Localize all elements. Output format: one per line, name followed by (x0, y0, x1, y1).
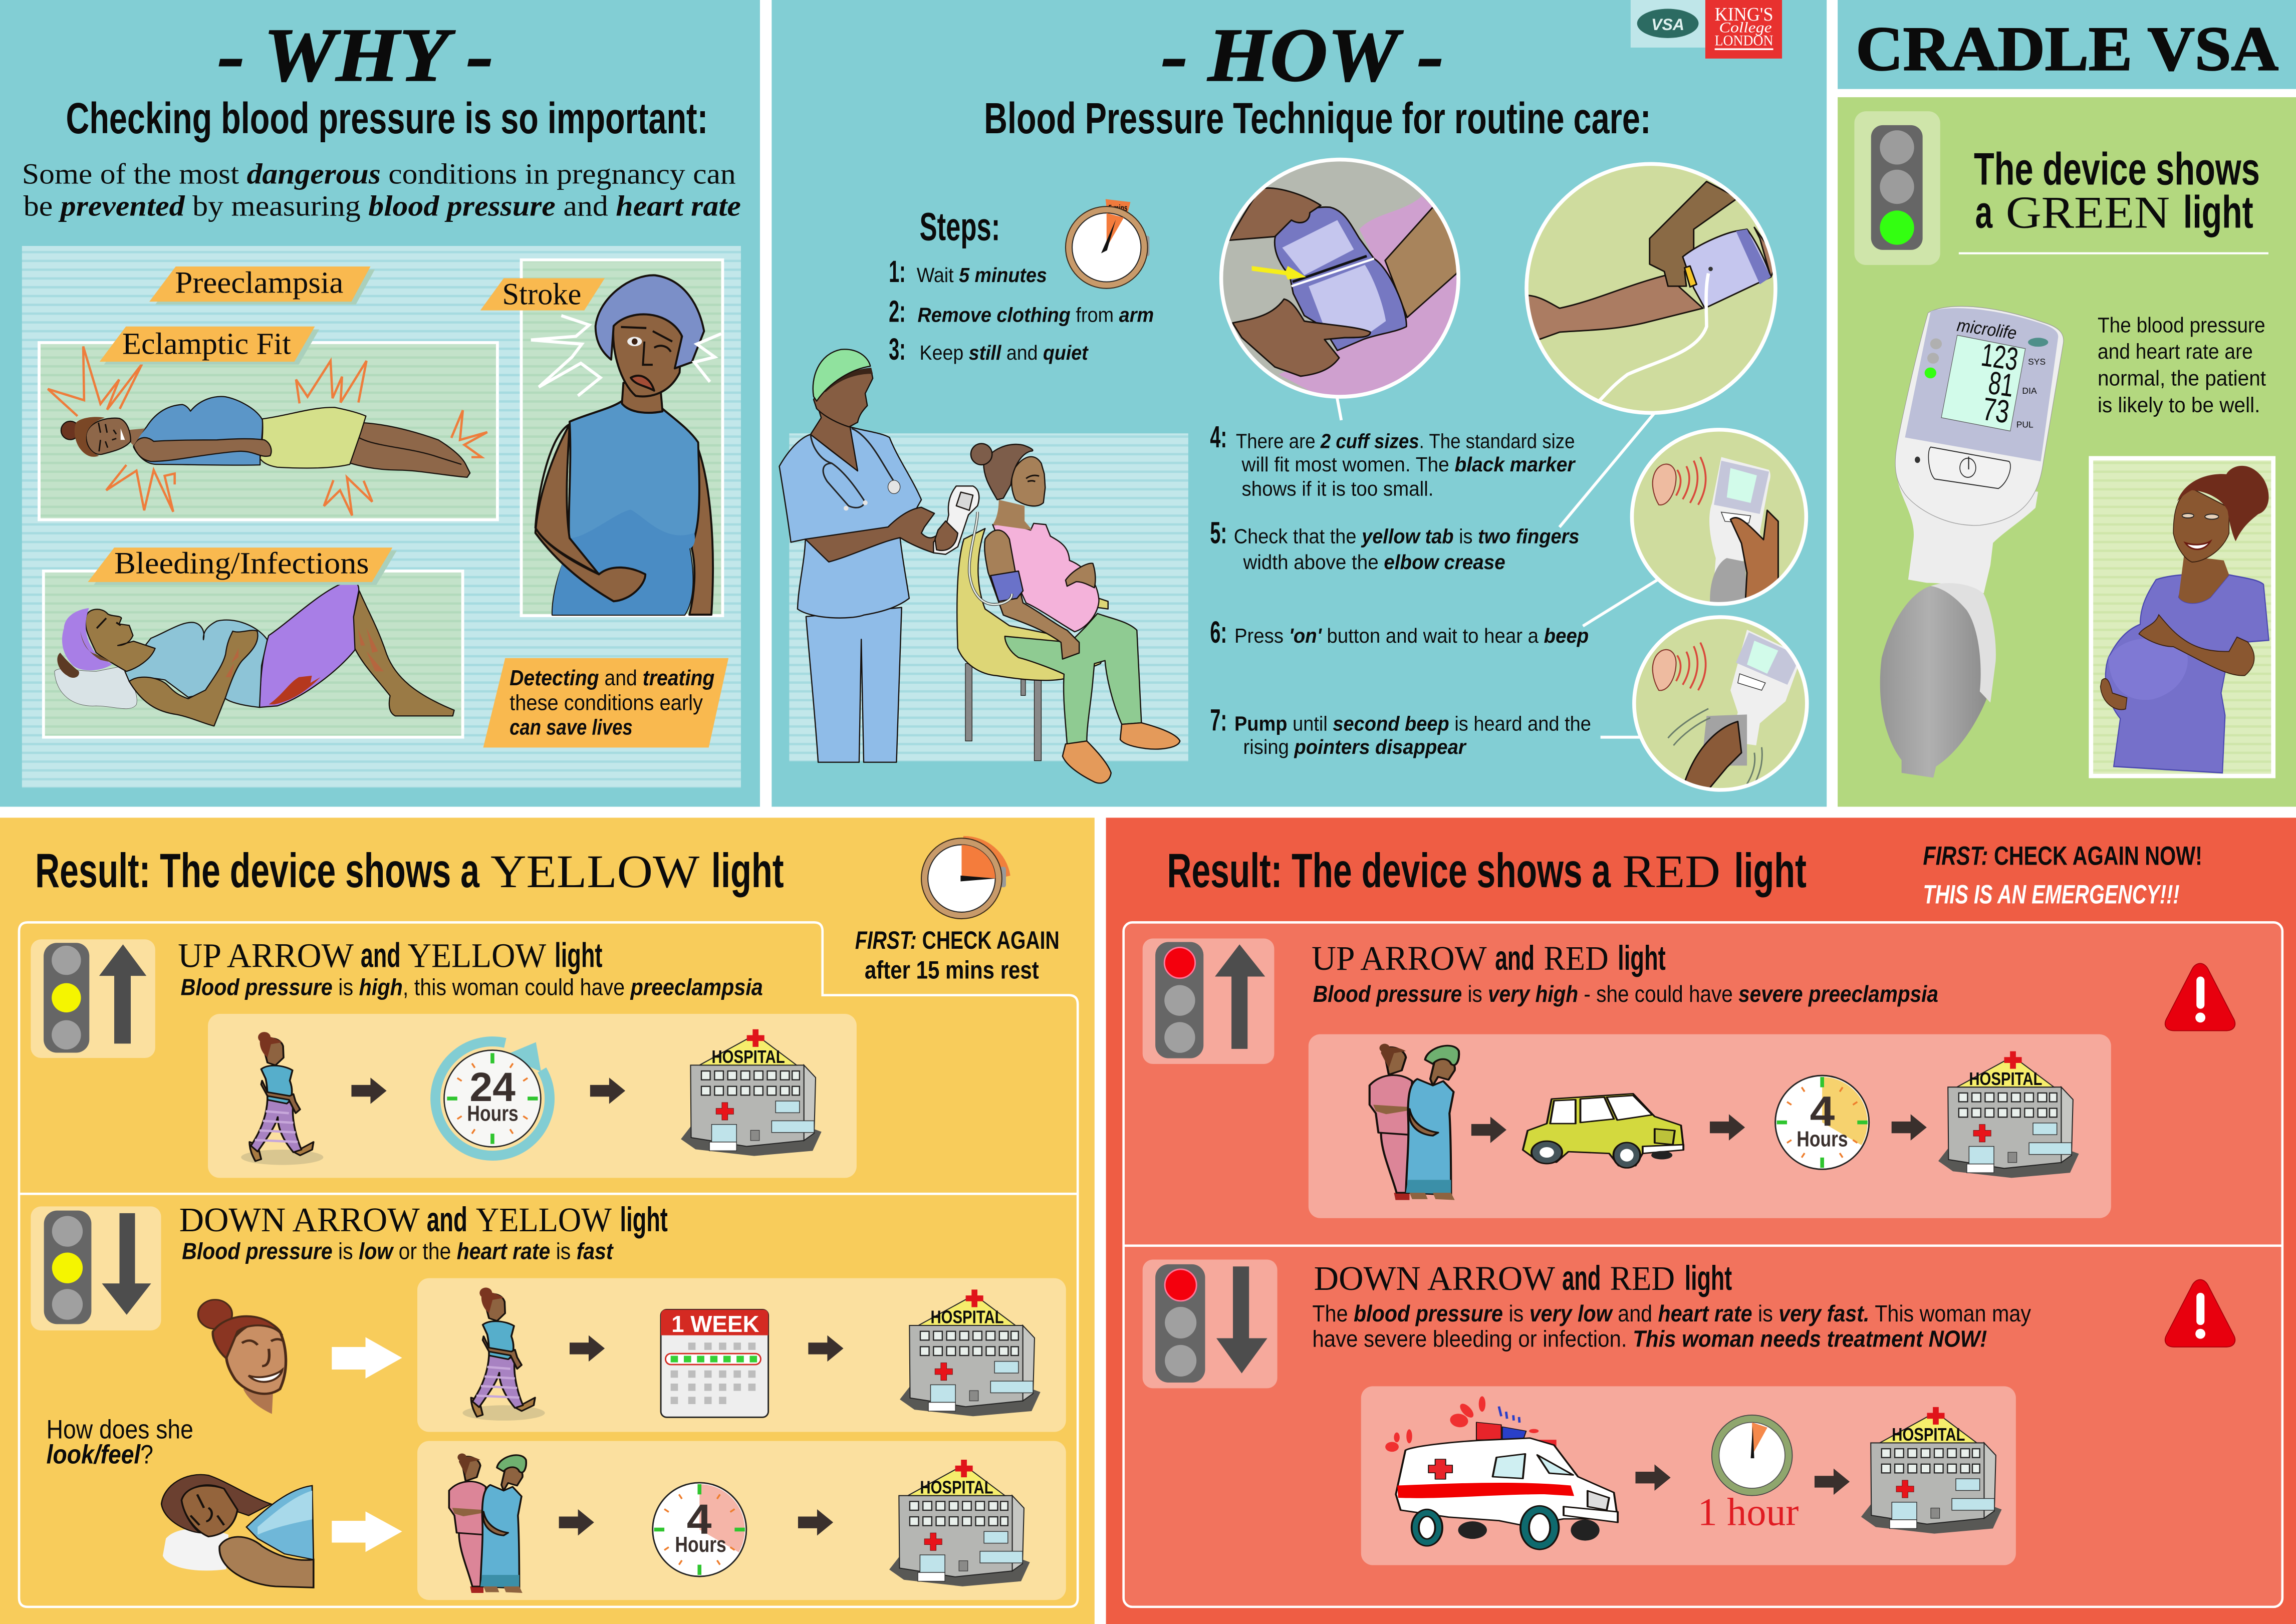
steps 4 to 7: width above the elbow crease (1243, 551, 1505, 574)
heading: yellow light: light (711, 844, 784, 898)
section: down arrow and red light (1143, 1259, 2235, 1565)
label: preeclampsia (149, 266, 375, 305)
text: down arrow heading (179, 1200, 668, 1239)
heading: green light: light (2183, 187, 2253, 237)
icon: traffic light up arrow (31, 939, 155, 1058)
steps 4 to 7: 4: (1210, 420, 1227, 454)
heading: steps: Steps: (920, 204, 1000, 248)
text: down arrow description: The blood pressure is very low and heart rate is very fast. This woman may (1312, 1300, 2031, 1326)
text: down arrow heading: and (427, 1200, 467, 1239)
text: up arrow heading: light (1618, 939, 1666, 977)
illustration: blood pressure device: 81 (1986, 365, 2016, 404)
icon: yellow car (1523, 1094, 1683, 1168)
icon: 4 hour clock: Hours (675, 1532, 726, 1557)
subtitle: how: Blood Pressure Technique for routine care: (984, 94, 1651, 143)
icon: hospital: HOSPITAL (711, 1046, 785, 1067)
panel: healthy woman (2091, 458, 2273, 776)
illustration: blood pressure device: 123 (1979, 337, 2020, 377)
panel: yellow light (0, 818, 1095, 1624)
intro text: Some of the most dangerous conditions in pregnancy can (22, 158, 736, 190)
icon: green traffic light (1854, 111, 1940, 265)
text: normal result: is likely to be well. (2098, 393, 2260, 417)
heading: yellow light: Result: The device shows a (35, 844, 480, 898)
pathway box: 24 hours (208, 1014, 857, 1178)
logo: vsa: VSA (1651, 16, 1684, 34)
arrow (808, 1335, 844, 1362)
illustration circle: yellow tab position (1526, 164, 1778, 413)
icon: 4 hour clock: 4 (1810, 1088, 1835, 1135)
arrow (1710, 1114, 1745, 1141)
steps 1 to 3: Remove clothing from arm (917, 303, 1154, 326)
steps 1 to 3: 1: (889, 254, 906, 289)
steps 1 to 3: Wait 5 minutes (917, 263, 1047, 287)
icon: hospital: HOSPITAL (1969, 1068, 2042, 1089)
icon: hospital: HOSPITAL (1892, 1424, 1965, 1445)
icon: calendar (661, 1309, 769, 1417)
steps 4 to 7: will fit most women. The black marker (1241, 453, 1576, 476)
illustration circle: cuff sizes (1221, 160, 1469, 407)
heading: red light: RED (1622, 846, 1720, 898)
icon: hospital: HOSPITAL (930, 1307, 1004, 1327)
icon: warning triangle (2165, 1280, 2235, 1347)
panel: how (772, 0, 1827, 806)
steps 1 to 3: 2: (889, 294, 906, 329)
text: up arrow heading: and (1495, 939, 1535, 977)
label: eclamptic fit (100, 327, 319, 365)
icon: stopwatch 15 mins (921, 836, 1010, 919)
callout: early detection (483, 658, 728, 747)
label: bleeding infections: Bleeding/Infections (114, 546, 369, 580)
steps 4 to 7 (1210, 420, 1591, 758)
text: check again: after 15 mins rest (865, 956, 1039, 984)
icon: 24 hour clock: 24 (469, 1064, 516, 1110)
icon: one hour clock (1712, 1415, 1793, 1496)
icon: hospital (681, 1029, 822, 1156)
arrow (351, 1077, 387, 1104)
pathway box: 4 hours (417, 1441, 1066, 1600)
steps 1 to 3: 3: (889, 332, 906, 367)
pathway box: 1 week (417, 1278, 1066, 1432)
icon: walking woman (241, 1032, 323, 1165)
heading: green light: GREEN (2006, 187, 2170, 237)
panel: cradle vsa title: CRADLE VSA (1856, 14, 2278, 84)
inner frame (1124, 922, 2282, 1607)
text: up arrow heading (178, 936, 603, 975)
striped illustration area (22, 246, 741, 787)
text: 1 hour: 1 hour (1698, 1490, 1799, 1534)
text: normal result (2098, 313, 2266, 417)
icon: calendar: 1 WEEK (671, 1311, 759, 1337)
steps 4 to 7: 6: (1210, 615, 1227, 650)
label: stroke: Stroke (502, 277, 581, 311)
icon: stopwatch 5 mins (1066, 199, 1149, 289)
outline frame (19, 922, 1078, 1607)
icon: warning triangle (2165, 963, 2235, 1031)
steps 4 to 7: Press 'on' button and wait to hear a beep (1234, 624, 1589, 647)
title: why: - WHY - (217, 13, 493, 97)
text: up arrow description: Blood pressure is very high - she could have severe preeclampsia (1313, 981, 1938, 1007)
arrow (1892, 1114, 1927, 1141)
text: down arrow heading: and (1562, 1259, 1601, 1297)
text: check again (855, 926, 1060, 984)
icon: traffic light down arrow (31, 1206, 161, 1330)
icon: ambulance (1383, 1396, 1618, 1549)
icon: 4 hour clock: Hours (1797, 1127, 1848, 1152)
illustration: blood pressure device: SYS (2028, 357, 2046, 367)
panel: green light (1838, 97, 2296, 806)
pathway box: car (1309, 1034, 2111, 1218)
icon: traffic light down arrow (1143, 1260, 1278, 1388)
title: how: - HOW - (1161, 13, 1444, 97)
steps 4 to 7: rising pointers disappear (1243, 735, 1467, 758)
connector lines (1337, 397, 1658, 737)
text: up arrow description: Blood pressure is high, this woman could have preeclampsia (181, 974, 763, 1000)
illustration: nurse (780, 349, 958, 762)
illustration: blood pressure device (1880, 307, 2064, 777)
icon: nurse and patient (449, 1453, 526, 1593)
arrow: white (332, 1511, 402, 1552)
illustration circle: pump bulb (1634, 617, 1807, 790)
illustration: blood pressure device: DIA (2022, 386, 2037, 396)
text: down arrow description: Blood pressure is low or the heart rate is fast (182, 1238, 614, 1264)
steps 4 to 7: 5: (1210, 515, 1227, 550)
steps 1 to 3: Keep still and quiet (920, 341, 1089, 364)
arrow (559, 1509, 594, 1535)
arrow (590, 1077, 625, 1104)
icon: orange shock marks (48, 347, 487, 515)
panel: bleeding infections (44, 571, 463, 737)
text: how does she look: How does she (47, 1415, 193, 1444)
callout: early detection: Detecting and treating (509, 666, 715, 690)
label: eclamptic fit: Eclamptic Fit (122, 327, 291, 361)
logo: kings college london (1705, 0, 1782, 59)
illustration: seated patient (933, 443, 1180, 783)
illustration: smiling face (198, 1300, 286, 1414)
steps 4 to 7: shows if it is too small. (1242, 477, 1433, 500)
arrow (1815, 1469, 1850, 1495)
illustration: woman bleeding (55, 581, 454, 726)
icon: hospital: HOSPITAL (920, 1477, 993, 1497)
intro text: be prevented by measuring blood pressure and heart rate (24, 190, 741, 222)
label: stroke (480, 277, 605, 311)
text: down arrow description (1312, 1300, 2031, 1351)
illustration: woman having a fit (61, 397, 470, 477)
text: up arrow heading (1312, 939, 1666, 977)
arrow (570, 1335, 605, 1362)
text: up arrow heading: UP ARROW (178, 937, 354, 975)
arrow: white (332, 1337, 402, 1379)
text: emergency: FIRST: CHECK AGAIN NOW! (1923, 842, 2202, 871)
icon: 4 hour clock (1775, 1075, 1869, 1169)
label: preeclampsia: Preeclampsia (175, 266, 343, 300)
text: down arrow heading: RED (1610, 1259, 1675, 1297)
logo: vsa (1631, 0, 1705, 48)
text: down arrow heading: light (620, 1200, 668, 1239)
text: check again: FIRST: CHECK AGAIN (855, 926, 1060, 954)
steps 4 to 7: 7: (1210, 703, 1227, 737)
heading: green light: a (1975, 187, 1993, 237)
subtitle: why: Checking blood pressure is so important: (66, 94, 708, 143)
icon: stopwatch 5 mins: 5 mins (1109, 203, 1128, 213)
heading: red light: light (1734, 844, 1807, 898)
callout: early detection: can save lives (509, 715, 633, 740)
icon: 4 hour clock: 4 (687, 1495, 711, 1543)
arrow (1471, 1117, 1506, 1143)
heading: red light: Result: The device shows a (1167, 844, 1611, 898)
icon: white stroke bursts (531, 316, 721, 396)
icon: hospital (1861, 1407, 2002, 1534)
panel: cradle vsa title (1838, 0, 2296, 89)
text: up arrow heading: RED (1544, 939, 1609, 977)
striped illustration area (789, 433, 1188, 761)
text: down arrow heading: DOWN ARROW (1314, 1259, 1555, 1297)
section: up arrow and yellow light (31, 936, 857, 1178)
illustration: blood pressure device: microlife (1956, 316, 2018, 343)
icon: hospital (900, 1289, 1041, 1416)
arrow (1636, 1464, 1671, 1491)
icon: nurse and patient (1370, 1044, 1459, 1200)
text: down arrow description: have severe bleeding or infection. This woman needs treatment NOW! (1312, 1325, 1987, 1351)
panel: eclamptic fit (39, 343, 497, 520)
panel: stroke (522, 260, 722, 616)
text: up arrow heading: and (361, 936, 401, 975)
text: how does she look: look/feel? (47, 1440, 153, 1469)
text: emergency (1923, 842, 2202, 909)
icon: 24 hour clock: Hours (467, 1101, 519, 1126)
text: how does she look (47, 1415, 193, 1469)
section: up arrow and red light (1143, 939, 2235, 1218)
label: bleeding infections (88, 546, 397, 585)
steps 4 to 7: Check that the yellow tab is two fingers (1234, 524, 1580, 548)
text: up arrow heading: UP ARROW (1312, 939, 1487, 977)
callout: early detection: these conditions early (509, 691, 703, 715)
logo: kings college london: College (1719, 20, 1772, 36)
panel: why (0, 0, 760, 806)
text: normal result: The blood pressure (2098, 313, 2265, 337)
steps 1 to 3 (889, 254, 1154, 367)
heading: yellow light: YELLOW (490, 846, 700, 898)
icon: walking woman (462, 1287, 545, 1421)
panel: red light (1106, 818, 2296, 1624)
section: down arrow and yellow light (31, 1200, 1066, 1600)
heading: green light (1974, 144, 2260, 237)
icon: hospital (889, 1460, 1030, 1586)
text: down arrow heading (1314, 1259, 1732, 1297)
illustration: unwell face (161, 1475, 314, 1587)
intro text (22, 158, 741, 222)
icon: 4 hour clock (653, 1483, 746, 1576)
icon: hospital (1938, 1051, 2079, 1178)
pathway box: ambulance (1361, 1386, 2016, 1565)
text: normal result: normal, the patient (2098, 367, 2266, 390)
illustration circle: press on button (1632, 430, 1806, 606)
text: down arrow heading: DOWN ARROW (179, 1201, 420, 1239)
illustration: blood pressure device: PUL (2016, 419, 2033, 429)
logo: kings college london: KING'S (1715, 4, 1773, 25)
illustration: blood pressure device: 73 (1980, 391, 2011, 430)
steps 4 to 7: There are 2 cuff sizes. The standard size (1236, 429, 1575, 452)
text: up arrow heading: light (555, 936, 603, 975)
text: down arrow heading: YELLOW (476, 1201, 612, 1239)
arrow (798, 1509, 833, 1535)
illustration: woman with stroke (536, 275, 713, 615)
icon: 24 hour clock (435, 1041, 550, 1156)
text: emergency: THIS IS AN EMERGENCY!!! (1923, 880, 2180, 909)
logo: kings college london: LONDON (1715, 33, 1773, 49)
text: up arrow heading: YELLOW (408, 937, 546, 975)
text: down arrow heading: light (1685, 1259, 1732, 1297)
text: normal result: and heart rate are (2098, 340, 2253, 363)
illustration: healthy pregnant woman (2101, 466, 2269, 773)
steps 4 to 7: Pump until second beep is heard and the (1234, 712, 1591, 735)
icon: traffic light up arrow (1143, 939, 1274, 1064)
